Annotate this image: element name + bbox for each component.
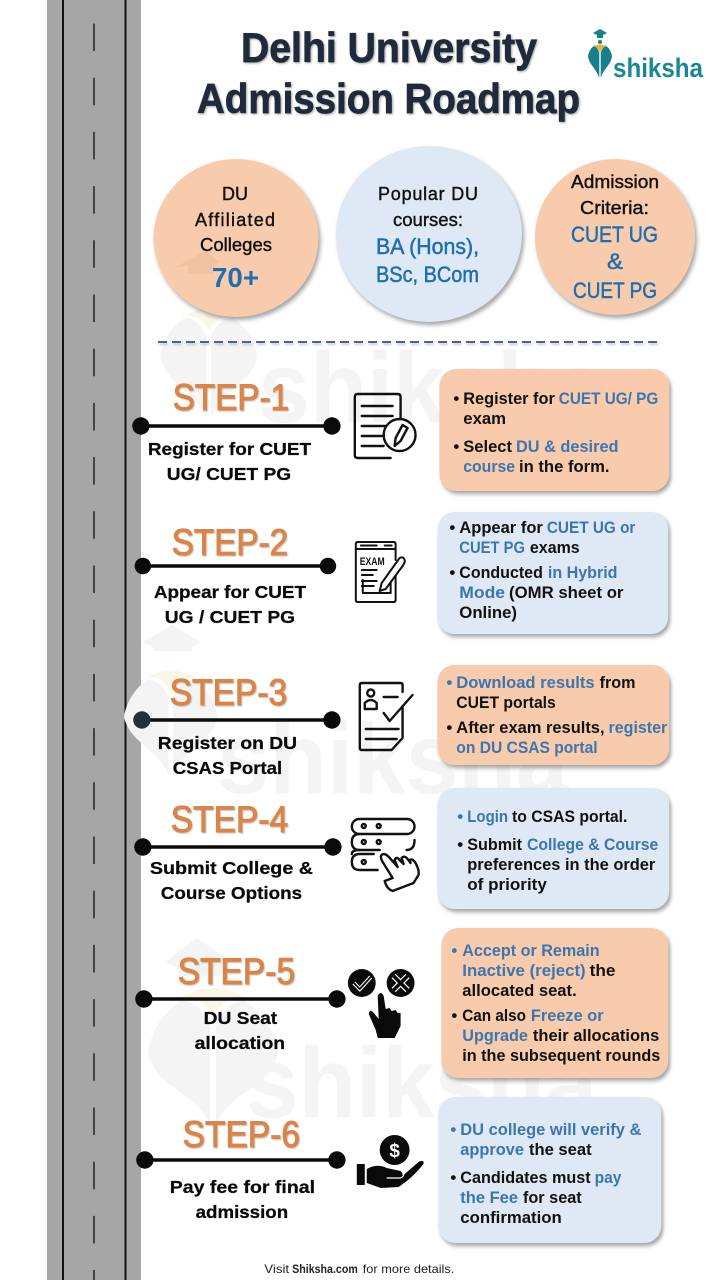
step 3 detail box: from bbox=[600, 673, 635, 692]
step 5 detail box: allocated seat. bbox=[462, 981, 577, 1000]
step 2 heading: STEP-2 bbox=[172, 522, 288, 563]
step 4 detail box: • bbox=[457, 807, 463, 826]
step 2 bbox=[135, 512, 668, 634]
step 5 label: allocation bbox=[195, 1033, 285, 1053]
step 3 heading: STEP-3 bbox=[170, 672, 287, 713]
title bbox=[197, 24, 580, 122]
road bbox=[47, 0, 141, 1280]
step 3 label: Register on DU bbox=[158, 733, 297, 753]
step 4 connector bbox=[134, 838, 342, 856]
step 6 detail box: • bbox=[450, 1120, 456, 1139]
step 3 detail box: After exam results, bbox=[456, 718, 605, 737]
icon: registration form with tick bbox=[360, 683, 413, 750]
step 5 heading: STEP-5 bbox=[178, 951, 295, 992]
step 3 detail box: • bbox=[446, 718, 452, 737]
icon: hand with dollar coin bbox=[357, 1135, 424, 1188]
step 2 detail box: in Hybrid bbox=[548, 563, 617, 582]
step 5 detail box: Can also bbox=[462, 1006, 526, 1025]
step 6 detail box bbox=[438, 1097, 661, 1243]
icon: server list with pointing hand bbox=[352, 819, 419, 891]
watermark: bottom: shiksha bbox=[246, 1027, 598, 1139]
step 5 detail box bbox=[441, 928, 668, 1078]
step 3 detail box: Download results bbox=[456, 673, 595, 692]
step 6 detail box: confirmation bbox=[460, 1208, 562, 1227]
step 6 detail box: DU college will verify & bbox=[460, 1120, 641, 1139]
footer note: Shiksha.com bbox=[292, 1264, 358, 1276]
step 4 detail box: • bbox=[457, 835, 463, 854]
footer note bbox=[264, 1264, 454, 1276]
step 6 heading: STEP-6 bbox=[183, 1114, 300, 1155]
step 4 detail box: of priority bbox=[467, 875, 547, 894]
step 4 label: Course Options bbox=[161, 883, 302, 903]
step 4 detail box: to CSAS portal. bbox=[512, 807, 627, 826]
step 2 label: UG / CUET PG bbox=[165, 607, 295, 627]
all steps bbox=[132, 369, 669, 1276]
step 3 detail box: on DU CSAS portal bbox=[456, 738, 598, 757]
step 3 connector bbox=[133, 711, 341, 729]
step 6 label: admission bbox=[196, 1202, 288, 1222]
step 6 detail box: the seat bbox=[529, 1140, 592, 1159]
step 1 bbox=[132, 369, 669, 491]
footer note: Visit bbox=[264, 1264, 290, 1276]
watermark: middle: shiksha bbox=[217, 703, 569, 815]
step 5 detail box: Freeze or bbox=[531, 1006, 604, 1025]
watermark: top: shiksha bbox=[258, 332, 607, 444]
step 2 detail box: Appear for bbox=[459, 518, 543, 537]
circle: admission criteria: CUET PG bbox=[573, 278, 657, 303]
step 2 detail box: Online) bbox=[459, 603, 517, 622]
circle: popular DU courses: courses: bbox=[393, 210, 463, 230]
step 5 label: DU Seat bbox=[204, 1008, 277, 1028]
step 2 label bbox=[154, 582, 306, 627]
footer note: for more details. bbox=[363, 1264, 454, 1276]
step 5 detail box: their allocations bbox=[533, 1026, 659, 1045]
step 5 bbox=[135, 928, 668, 1078]
step 2 connector bbox=[135, 558, 336, 574]
step 6 label bbox=[170, 1177, 315, 1222]
step 5 detail box: Inactive (reject) bbox=[462, 961, 586, 980]
step 1 detail box: • bbox=[453, 437, 459, 456]
step 1 detail box: CUET UG/ PG bbox=[559, 389, 658, 408]
step 3 label bbox=[158, 733, 297, 778]
title: Delhi University bbox=[241, 24, 538, 71]
step 6 detail box: pay bbox=[595, 1168, 622, 1187]
step 2 detail box: • bbox=[449, 518, 455, 537]
step 3 detail box: • bbox=[446, 673, 452, 692]
circle: DU affiliated colleges bbox=[154, 159, 318, 317]
circle: DU affiliated colleges: Affiliated bbox=[195, 210, 275, 230]
step 5 detail box: in the subsequent rounds bbox=[462, 1046, 660, 1065]
step 6 bbox=[136, 1097, 661, 1243]
circle: popular DU courses bbox=[336, 146, 522, 322]
step 1 detail box: • bbox=[453, 389, 459, 408]
step 1 connector bbox=[132, 417, 341, 435]
circle: admission criteria: Admission bbox=[571, 172, 659, 192]
logo: shiksha: shiksha bbox=[613, 53, 704, 83]
circle: DU affiliated colleges: 70+ bbox=[212, 262, 259, 293]
step 4 detail box: Login bbox=[467, 807, 508, 826]
dashed divider bbox=[158, 341, 660, 343]
step 2 detail box: CUET UG or bbox=[547, 518, 636, 537]
step 1 detail box: Register for bbox=[463, 389, 555, 408]
step 5 detail box: the bbox=[590, 961, 616, 980]
circle: DU affiliated colleges: DU bbox=[222, 184, 248, 204]
step 1 detail box: course bbox=[463, 457, 515, 476]
icon: exam sheet: EXAM bbox=[360, 556, 385, 568]
logo: shiksha bbox=[588, 29, 704, 83]
icon: form with pen bbox=[355, 394, 416, 458]
step 5 detail box: • bbox=[451, 941, 457, 960]
circle: admission criteria bbox=[535, 159, 695, 315]
step 2 detail box bbox=[437, 512, 668, 634]
step 1 heading: STEP-1 bbox=[173, 377, 289, 418]
step 2 detail box: CUET PG bbox=[459, 538, 525, 557]
step 4 detail box: College & Course bbox=[527, 835, 658, 854]
circle: admission criteria: & bbox=[607, 249, 623, 274]
icon: hand with dollar coin: $ bbox=[389, 1141, 400, 1162]
step 3 bbox=[133, 665, 669, 778]
step 3 detail box bbox=[437, 665, 669, 765]
step 5 detail box: Upgrade bbox=[462, 1026, 528, 1045]
watermark: top bbox=[160, 308, 607, 444]
watermark: bottom bbox=[148, 938, 598, 1139]
faint watermark cap bbox=[174, 251, 220, 274]
step 6 label: Pay fee for final bbox=[170, 1177, 315, 1197]
step 5 connector bbox=[135, 990, 346, 1008]
step 1 detail box bbox=[439, 369, 669, 491]
step 1 label: Register for CUET bbox=[148, 439, 311, 459]
step 4 label: Submit College & bbox=[150, 858, 313, 878]
circle: admission criteria: CUET UG bbox=[571, 222, 658, 247]
step 1 label: UG/ CUET PG bbox=[167, 464, 291, 484]
circle: popular DU courses: Popular DU bbox=[378, 184, 478, 204]
step 1 label bbox=[148, 439, 311, 484]
circle: admission criteria: Criteria: bbox=[580, 198, 649, 218]
step 4 heading: STEP-4 bbox=[171, 799, 288, 840]
step 4 detail box bbox=[437, 788, 669, 909]
step 6 detail box: Candidates must bbox=[460, 1168, 591, 1187]
step 4 label bbox=[150, 858, 313, 903]
step 5 label bbox=[195, 1008, 285, 1053]
circle: DU affiliated colleges: Colleges bbox=[200, 235, 272, 255]
watermark: middle bbox=[124, 625, 569, 815]
step 6 detail box: the Fee bbox=[460, 1188, 518, 1207]
step 1 detail box: DU & desired bbox=[516, 437, 618, 456]
step 6 detail box: for seat bbox=[523, 1188, 582, 1207]
step 3 detail box: CUET portals bbox=[456, 693, 556, 712]
step 6 connector bbox=[136, 1151, 346, 1169]
step 4 detail box: Submit bbox=[467, 835, 522, 854]
step 6 detail box: approve bbox=[460, 1140, 524, 1159]
step 4 detail box: preferences in the order bbox=[467, 855, 656, 874]
step 2 detail box: Mode bbox=[459, 583, 505, 602]
title: Admission Roadmap bbox=[197, 75, 580, 122]
step 5 detail box: Accept or Remain bbox=[462, 941, 600, 960]
step 6 detail box: • bbox=[450, 1168, 456, 1187]
step 2 label: Appear for CUET bbox=[154, 582, 306, 602]
step 2 detail box: (OMR sheet or bbox=[509, 583, 624, 602]
icon: accept or reject with hand bbox=[348, 969, 415, 1038]
step 1 detail box: Select bbox=[463, 437, 512, 456]
step 5 detail box: • bbox=[451, 1006, 457, 1025]
step 3 label: CSAS Portal bbox=[173, 758, 282, 778]
step 2 detail box: • bbox=[449, 563, 455, 582]
step 3 detail box: register bbox=[609, 718, 668, 737]
step 4 bbox=[134, 788, 669, 909]
circle: popular DU courses: BA (Hons), bbox=[376, 234, 479, 259]
step 1 detail box: in the form. bbox=[519, 457, 610, 476]
icon: exam sheet bbox=[356, 542, 405, 602]
step 1 detail box: exam bbox=[463, 409, 506, 428]
step 2 detail box: exams bbox=[530, 538, 580, 557]
circle: popular DU courses: BSc, BCom bbox=[376, 262, 479, 287]
step 2 detail box: Conducted bbox=[459, 563, 543, 582]
